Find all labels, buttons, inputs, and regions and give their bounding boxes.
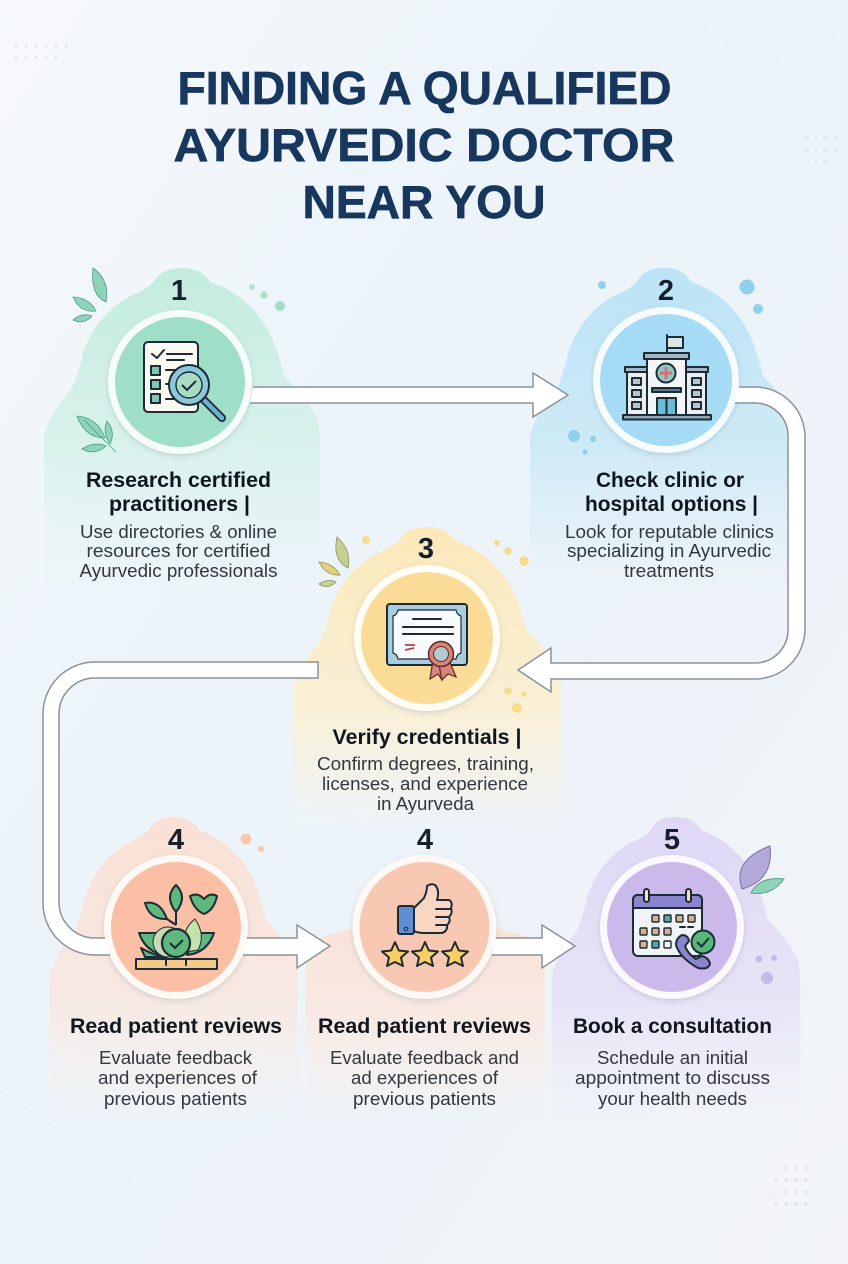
heading: Read patient reviews <box>70 1015 282 1038</box>
icon: hospital building <box>623 335 711 420</box>
body text: Confirm degrees, training, <box>317 754 534 774</box>
step number 5: 5 <box>664 824 680 856</box>
heading: Verify credentials | <box>332 726 522 749</box>
panel: step 2 clinic <box>530 268 798 590</box>
decorative dots <box>568 280 763 455</box>
arrow: step 2 to step 3 <box>518 387 805 692</box>
icon circle <box>352 855 496 999</box>
body text <box>575 1048 770 1109</box>
body text <box>330 1048 519 1109</box>
arrow: step 4 to step 5 <box>492 925 575 968</box>
icon circle <box>104 855 248 999</box>
decorative dots <box>240 834 264 852</box>
body text: specializing in Ayurvedic <box>567 541 771 561</box>
heading: hospital options | <box>585 493 758 516</box>
icon: certificate with ribbon <box>387 604 467 680</box>
body text: Use directories & online <box>80 522 277 542</box>
icon: calendar and phone <box>633 889 714 968</box>
title: NEAR YOU <box>302 176 546 228</box>
icon circle <box>108 310 252 454</box>
body text: Schedule an initial <box>597 1048 748 1068</box>
heading: Read patient reviews <box>318 1015 531 1038</box>
body text: in Ayurveda <box>377 794 475 814</box>
step number 2: 2 <box>658 275 674 307</box>
heading <box>585 469 758 516</box>
panel: step 5 consultation <box>552 817 800 1123</box>
body text <box>565 522 774 581</box>
icon: thumbs up and stars <box>382 884 468 966</box>
panel: step 1 research <box>44 268 320 590</box>
decorative leaves and dots <box>73 268 285 452</box>
body text: Evaluate feedback and <box>330 1048 519 1068</box>
panel: step 4 patient reviews middle <box>306 824 545 1120</box>
body text: treatments <box>624 561 714 581</box>
heading: Check clinic or <box>596 469 744 492</box>
body text: licenses, and experience <box>322 774 528 794</box>
body text <box>98 1048 258 1109</box>
step number 4: 4 <box>417 824 433 856</box>
body text: ad experiences of <box>351 1068 499 1088</box>
body text: previous patients <box>353 1089 496 1109</box>
body text: previous patients <box>104 1089 247 1109</box>
heading: Research certified <box>86 469 271 492</box>
body text: Evaluate feedback <box>99 1048 253 1068</box>
heading <box>86 469 271 516</box>
title <box>174 62 674 228</box>
arrow: step 4 to step 4 <box>243 925 330 968</box>
decorative leaves and dots <box>740 846 784 984</box>
body text: Look for reputable clinics <box>565 522 774 542</box>
step number 3: 3 <box>418 533 434 565</box>
arrow: step 1 to step 2 <box>250 373 568 417</box>
body text <box>317 754 534 814</box>
icon: checklist with magnifier <box>144 342 222 418</box>
title: AYURVEDIC DOCTOR <box>174 119 674 171</box>
step number 4: 4 <box>168 824 184 856</box>
body text: appointment to discuss <box>575 1068 770 1088</box>
panel: step 3 credentials <box>293 527 561 833</box>
icon circle <box>354 565 500 711</box>
body text: resources for certified <box>86 541 270 561</box>
decorative leaves and dots <box>319 536 529 713</box>
heading: Book a consultation <box>573 1015 772 1038</box>
arrow: step 3 to step 4 <box>43 662 318 955</box>
body text <box>80 522 278 581</box>
body text: Ayurvedic professionals <box>80 561 278 581</box>
body text: your health needs <box>598 1089 747 1109</box>
title: FINDING A QUALIFIED <box>178 62 672 114</box>
icon: plant with check <box>136 885 217 969</box>
step number 1: 1 <box>171 275 187 307</box>
heading: practitioners | <box>109 493 250 516</box>
icon circle <box>593 307 739 453</box>
body text: and experiences of <box>98 1068 258 1088</box>
icon circle <box>600 855 744 999</box>
panel: step 4 patient reviews left <box>50 817 298 1123</box>
